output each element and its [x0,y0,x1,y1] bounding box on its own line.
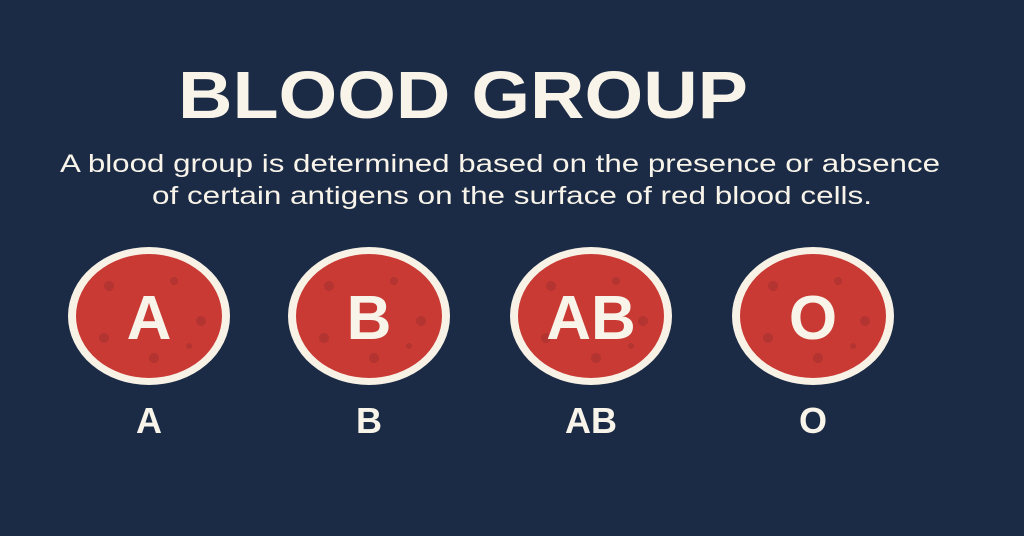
icon: blood cell AB [510,247,672,385]
labels: AB [565,400,617,441]
icon: blood cell A: A [127,284,171,353]
labels: B [356,400,382,441]
icon: blood cell B: B [347,284,391,353]
subtitle text [60,150,940,210]
icon: blood cell AB: AB [546,284,636,353]
title: BLOOD GROUP [178,58,748,133]
labels: O [799,400,827,441]
icon: blood cell O: O [789,284,837,353]
subtitle text: A blood group is determined based on the presence or absence [60,150,940,178]
labels [136,400,827,441]
icon: blood cell B [288,247,450,385]
icon: blood cell O [732,247,894,385]
subtitle text: of certain antigens on the surface of red blood cells. [152,182,872,210]
labels: A [136,400,162,441]
icon: blood cell A [68,247,230,385]
